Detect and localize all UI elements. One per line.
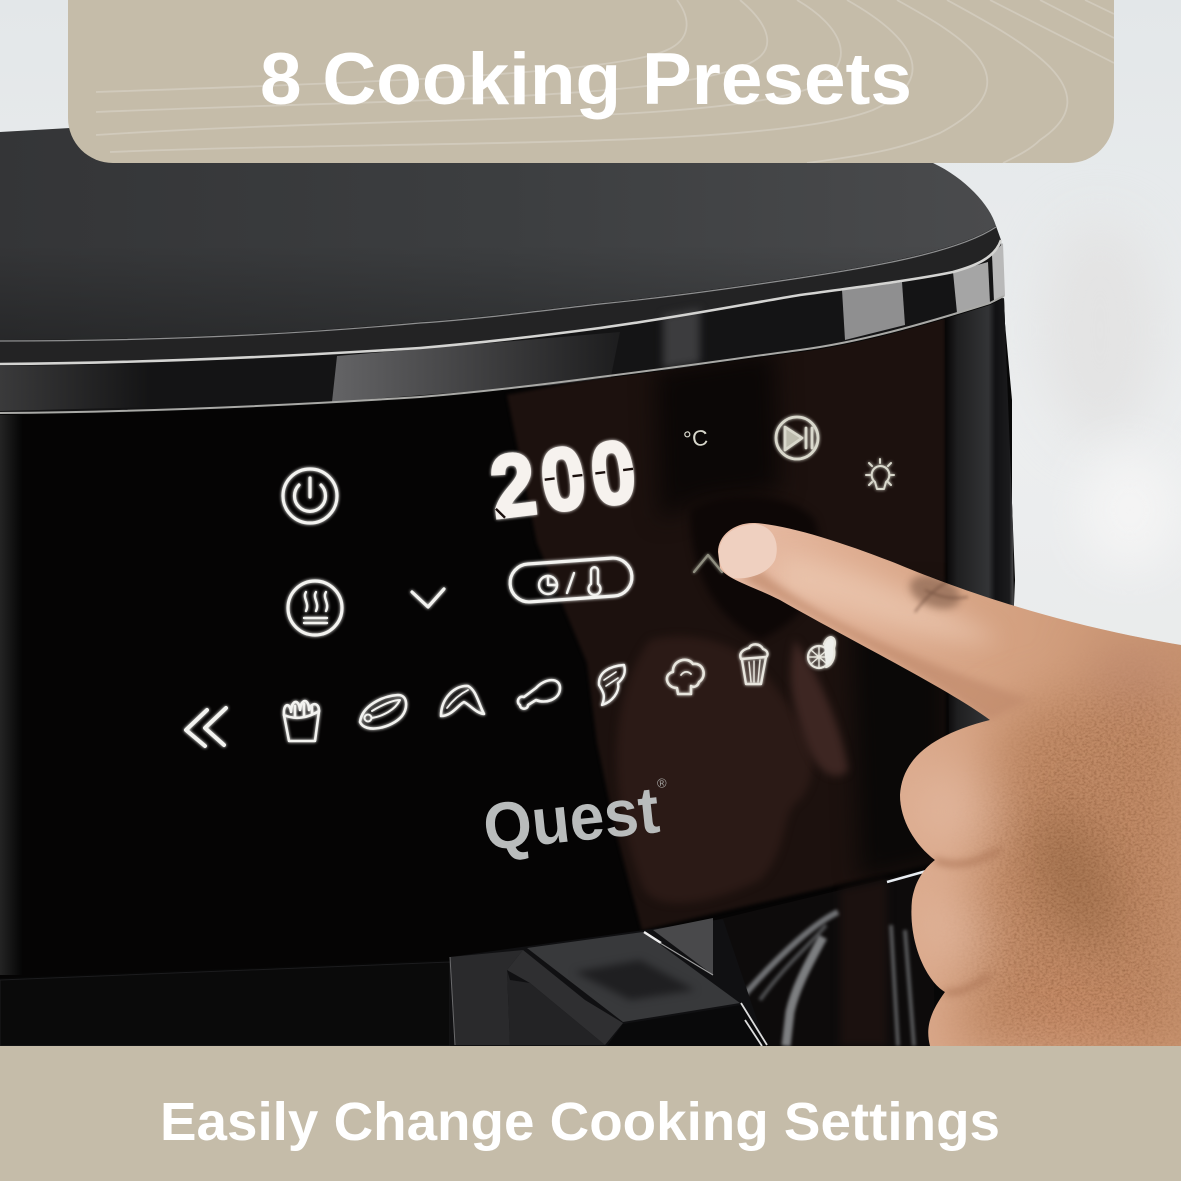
icon: fish (599, 665, 625, 705)
icon: light bulb (866, 459, 894, 489)
body reflections (0, 295, 1015, 975)
chrome band (0, 240, 1005, 413)
icon: broccoli (667, 660, 704, 694)
icon: fries (284, 701, 319, 741)
icon: steak (360, 695, 406, 729)
icon: citrus fruit (808, 637, 835, 668)
control panel icons (186, 417, 894, 746)
icon: play pause (776, 417, 818, 459)
fingernail (719, 524, 777, 578)
skin texture (970, 682, 1181, 1046)
bottom caption: Easily Change Cooking Settings (160, 1092, 1000, 1152)
icon: time and temperature pill (509, 557, 633, 603)
air fryer lid (0, 128, 996, 340)
finger light tone (780, 555, 1000, 642)
icon: chevron down (412, 589, 444, 607)
panel contour lines (96, 0, 1114, 163)
icon: heat steam button (288, 581, 342, 635)
finger crease shadows (935, 850, 1000, 993)
icon: chicken wing (441, 686, 484, 716)
air fryer body (0, 298, 1015, 978)
title: 8 Cooking Presets (260, 39, 912, 120)
segment gaps (493, 469, 637, 519)
Quest brand logo: ® (656, 775, 668, 791)
icon: power button (283, 469, 337, 523)
knuckle crease (915, 578, 968, 612)
knuckle shading (906, 572, 963, 613)
underlay so no wall shows through the body seams (0, 226, 1012, 1046)
icon: chicken drumstick (518, 680, 560, 709)
basket handle (450, 918, 767, 1046)
drawer front left (0, 962, 450, 1046)
icon: cupcake (740, 644, 768, 684)
icon: chevron up behind finger (694, 555, 722, 572)
title panel (68, 0, 1114, 163)
hand shadow tones (905, 640, 1181, 1046)
bottom caption band (0, 1046, 1181, 1181)
temperature display 200: 200 (485, 421, 641, 537)
drawer front right (716, 868, 935, 1046)
hand pointing at the panel (718, 523, 1181, 1046)
lid lip (0, 226, 1001, 364)
celsius label: °C (682, 425, 709, 452)
lower finger shadow (740, 570, 1030, 720)
Quest brand logo: Quest (480, 772, 663, 864)
icon: double chevron left (186, 708, 226, 746)
